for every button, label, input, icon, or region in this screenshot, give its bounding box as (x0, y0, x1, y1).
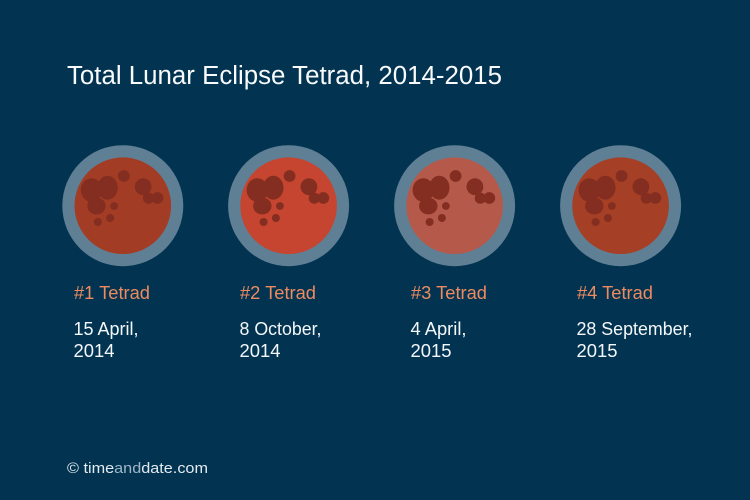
date: 4 April, 2015: 2015 (410, 341, 452, 361)
date: 4 April, 2015: 4 April, (410, 319, 466, 339)
panel: tetrad 4 (560, 145, 692, 361)
icon: moon 2 (228, 145, 349, 266)
label: #4 Tetrad: #4 Tetrad (577, 283, 653, 303)
date: 15 April, 2014: 15 April, (74, 319, 138, 339)
panel: tetrad 1 (62, 145, 183, 361)
panel: tetrad 3 (394, 145, 515, 361)
date: 15 April, 2014: 2014 (74, 341, 114, 361)
date: 8 October, 2014: 2014 (240, 341, 280, 361)
icon: moon 4 (560, 145, 681, 266)
date: 28 September, 2015: 28 September, (576, 319, 692, 339)
label: #3 Tetrad: #3 Tetrad (411, 283, 487, 303)
icon: moon 1 (62, 145, 183, 266)
date: 28 September, 2015: 2015 (576, 341, 618, 361)
label: #2 Tetrad: #2 Tetrad (240, 283, 316, 303)
title: Total Lunar Eclipse Tetrad, 2014-2015 (67, 62, 502, 90)
label: #1 Tetrad: #1 Tetrad (74, 283, 150, 303)
icon: moon 3 (394, 145, 515, 266)
panel: tetrad 2 (228, 145, 349, 361)
date: 8 October, 2014: 8 October, (240, 319, 322, 339)
credit: © timeanddate.com (67, 460, 208, 477)
